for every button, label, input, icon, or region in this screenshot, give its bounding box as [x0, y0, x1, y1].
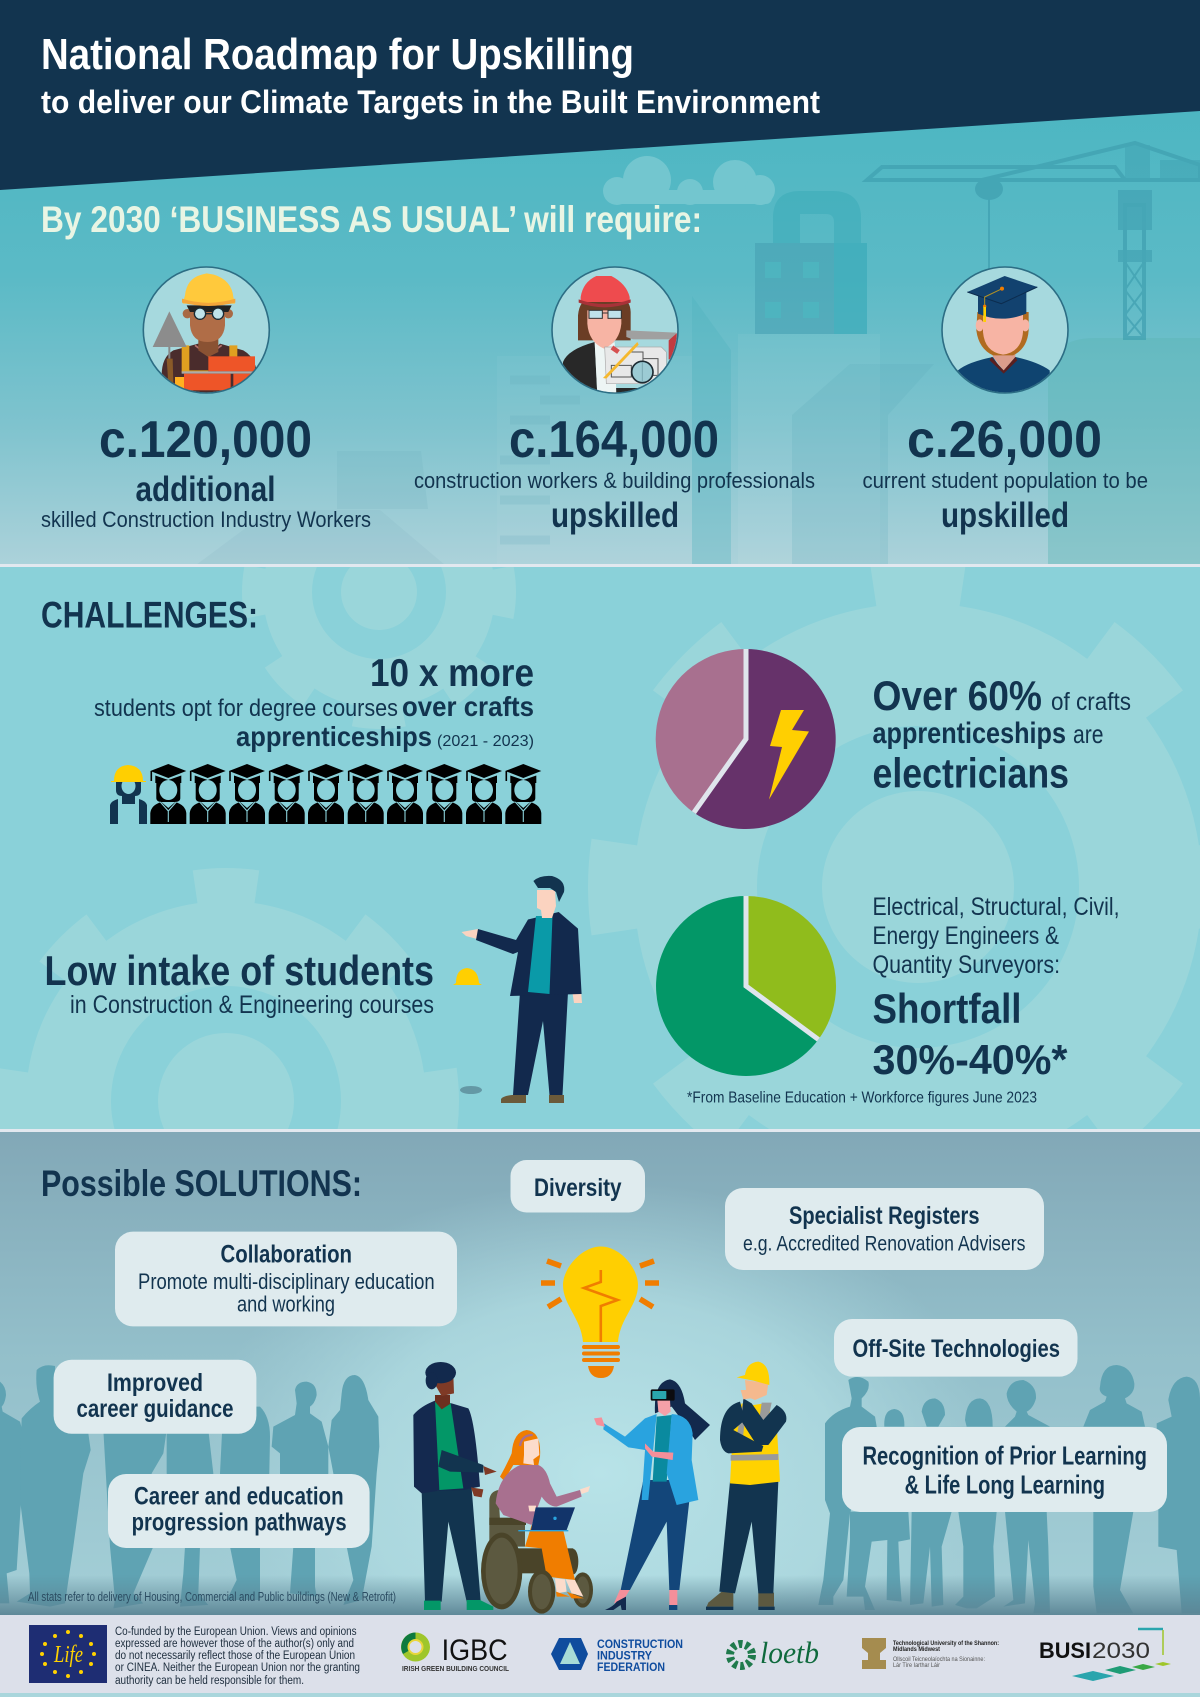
funding disclaimer: Co-funded by the European Union. Views and opinions	[115, 1626, 357, 1638]
title: National Roadmap for Upskilling	[41, 30, 634, 79]
callout: career guidance: Improved	[107, 1369, 203, 1397]
callout: prior learning	[842, 1427, 1167, 1512]
logo: LOETB	[730, 1635, 819, 1670]
logo: TUS: Lár Tíre Iarthar Láir	[893, 1663, 940, 1669]
crowd silhouettes: right	[818, 1365, 1200, 1613]
callout: progression pathways: progression pathways	[132, 1509, 347, 1537]
logo: IGBC: IRISH GREEN BUILDING COUNCIL	[402, 1666, 510, 1673]
text: shortfall: Energy Engineers &	[872, 922, 1059, 950]
pie chart: shortfall	[656, 896, 836, 1076]
logo: Construction Industry Federation: INDUSTRY	[597, 1648, 652, 1662]
logo: EU LIFE flag	[29, 1625, 107, 1683]
callout: career guidance: career guidance	[76, 1395, 234, 1423]
stat: workers to upskill: c.164,000	[509, 411, 719, 469]
text: over 60 percent electricians: are	[1073, 719, 1104, 749]
text: low intake	[44, 947, 434, 1019]
logo: LOETB: loetb	[760, 1635, 819, 1670]
logo: TUS: Ollscoil Teicneolaíochta na Sionainne:	[893, 1657, 985, 1663]
text: degree vs crafts: students opt for degree courses	[94, 695, 398, 722]
note: scope of stats: All stats refer to delivery of Housing, Commercial and Public buildings (New & Retrofit)	[28, 1589, 396, 1604]
stat: workers to upskill: upskilled	[551, 496, 679, 535]
background gears	[0, 567, 1200, 1129]
stat: additional workers	[41, 411, 371, 532]
callout: progression pathways	[108, 1474, 370, 1548]
panel: business as usual	[0, 0, 1200, 565]
callout: collaboration: Promote multi-disciplinary education	[138, 1269, 435, 1294]
logo: IGBC: IGBC	[442, 1634, 508, 1667]
stat: workers to upskill: construction workers & building professionals	[414, 468, 815, 493]
figure: woman in wheelchair	[481, 1430, 593, 1614]
text: shortfall	[872, 893, 1120, 1083]
callout: collaboration	[115, 1232, 457, 1326]
subtitle: to deliver our Climate Targets in the Built Environment	[41, 84, 820, 120]
pie chart: electricians	[656, 649, 836, 829]
callout: career guidance	[54, 1360, 256, 1434]
logo: BUSI2030	[1039, 1629, 1171, 1681]
callout: specialist registers: e.g. Accredited Renovation Advisers	[743, 1232, 1026, 1255]
stat: students to upskill: c.26,000	[907, 411, 1102, 469]
logo: Construction Industry Federation: FEDERATION	[597, 1660, 665, 1674]
logo: EU LIFE flag: Life	[53, 1642, 83, 1668]
text: over 60 percent electricians: of crafts	[1051, 688, 1131, 716]
callout: off-site technologies: Off-Site Technologies	[852, 1335, 1060, 1363]
panel: possible solutions	[0, 1132, 1200, 1615]
logo: Construction Industry Federation	[551, 1637, 683, 1674]
stat: students to upskill: upskilled	[941, 496, 1069, 535]
text: shortfall: Electrical, Structural, Civil,	[872, 893, 1120, 921]
callout: prior learning: & Life Long Learning	[905, 1470, 1105, 1500]
funding disclaimer: authority can be held responsible for them.	[115, 1675, 304, 1687]
funding disclaimer	[115, 1626, 360, 1687]
heading: Possible SOLUTIONS:	[41, 1163, 362, 1204]
text: over 60 percent electricians: Over 60%	[872, 672, 1042, 719]
callout: progression pathways: Career and education	[134, 1483, 344, 1511]
figure: construction worker in hi-vis	[706, 1362, 786, 1610]
section heading: By 2030 ‘BUSINESS AS USUAL’ will require:	[41, 199, 702, 240]
header banner	[0, 0, 1200, 190]
callout: specialist registers	[725, 1188, 1044, 1270]
heading: CHALLENGES:	[41, 594, 258, 636]
text: degree vs crafts: over crafts	[402, 691, 534, 722]
footnote: *From Baseline Education + Workforce figures June 2023	[687, 1090, 1037, 1106]
text: shortfall: Quantity Surveyors:	[872, 951, 1060, 979]
callout: off-site technologies	[834, 1319, 1078, 1377]
callout: specialist registers: Specialist Registers	[789, 1202, 980, 1230]
text: over 60 percent electricians: electricians	[872, 750, 1069, 796]
logo: BUSI2030: 2030	[1092, 1638, 1150, 1663]
stat: workers to upskill	[414, 411, 815, 535]
city and crane backdrop	[427, 141, 1200, 564]
logo: BUSI2030: BUSI	[1039, 1638, 1091, 1663]
crowd silhouettes: left	[0, 1365, 379, 1608]
funding disclaimer: expressed are however those of the author(s) only and	[115, 1638, 354, 1650]
figure: man in green shirt	[413, 1362, 497, 1610]
text: low intake: Low intake of students	[44, 947, 434, 994]
text: shortfall: 30%-40%*	[872, 1036, 1068, 1083]
stat: additional workers: additional	[136, 470, 276, 509]
icon: graduate student	[942, 267, 1068, 395]
text: degree vs crafts: apprenticeships	[236, 721, 432, 752]
text: over 60 percent electricians	[872, 672, 1131, 796]
panel: footer	[0, 1615, 1200, 1697]
icon: construction worker	[143, 267, 269, 395]
figures: group of four people	[413, 1362, 786, 1614]
logo: TUS: Technological University of the Shannon:	[893, 1641, 999, 1647]
text: degree vs crafts: (2021 - 2023)	[437, 733, 534, 750]
icon: hard hat	[453, 968, 482, 985]
text: shortfall: Shortfall	[872, 985, 1022, 1032]
callout: collaboration: Collaboration	[220, 1240, 352, 1268]
funding disclaimer: do not necessarily reflect those of the European Union	[115, 1650, 355, 1662]
text: low intake: in Construction & Engineering courses	[70, 991, 434, 1019]
text: degree vs crafts	[94, 652, 534, 752]
pictogram: one apprentice to ten graduates	[110, 764, 541, 824]
stat: students to upskill: current student population to be	[862, 468, 1148, 493]
logo: IGBC	[401, 1632, 510, 1673]
text: over 60 percent electricians: apprenticeships	[872, 717, 1066, 750]
stat: additional workers: c.120,000	[99, 411, 312, 469]
figure: man pointing	[460, 876, 582, 1103]
stat: students to upskill	[862, 411, 1148, 535]
callout: diversity: Diversity	[534, 1174, 622, 1202]
logo: TUS	[862, 1638, 999, 1669]
callout: diversity	[510, 1160, 645, 1212]
icon: building professional	[552, 267, 678, 395]
logo: Construction Industry Federation: CONSTRUCTION	[597, 1637, 683, 1651]
stat: additional workers: skilled Construction Industry Workers	[41, 507, 371, 532]
funding disclaimer: or CINEA. Neither the European Union nor the granting	[115, 1662, 360, 1674]
callout: collaboration: and working	[237, 1292, 335, 1316]
figure: woman with VR headset	[594, 1379, 710, 1610]
text: degree vs crafts: 10 x more	[370, 652, 534, 695]
panel: challenges	[0, 567, 1200, 1129]
logo: TUS: Midlands Midwest	[893, 1647, 940, 1653]
icon: light bulb	[541, 1246, 659, 1378]
